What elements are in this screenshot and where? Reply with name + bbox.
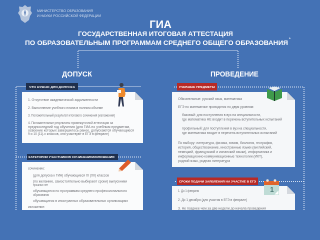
text: subjects list xyxy=(178,97,282,163)
heading: ПРОВЕДЕНИЕ: ПРОВЕДЕНИЕ xyxy=(210,72,259,78)
text: subjects list: ЕГЭ по математике проводится по двум уровням: xyxy=(178,105,254,109)
title xyxy=(25,19,291,47)
text: subjects list: немецкий, французский и испанский языки), информатика и xyxy=(178,150,272,154)
text: subjects list: где математика входит в перечень вступительных испытаний xyxy=(182,131,277,135)
badge: essay categories: КАТЕГОРИИ УЧАСТНИКОВ СОЧИНЕНИЯ/ИЗЛОЖЕНИЯ xyxy=(28,155,115,159)
ministry name: И НАУКИ РОССИЙСКОЙ ФЕДЕРАЦИИ xyxy=(37,14,102,18)
list: admission conditions: 3. Положительный результат итогового сочинения (изложения) xyxy=(28,114,115,118)
badge: deadlines: СРОКИ ПОДАЧИ ЗАЯВЛЕНИЯ НА УЧАСТИЕ В ЕГЭ xyxy=(179,180,257,184)
list: admission conditions: 9 и 10 (11)-х классов, они участвуют в ЕГЭ в феврале) xyxy=(28,132,109,136)
badge: what is needed: ЧТО НУЖНО ДЛЯ ДОПУСКА xyxy=(29,85,76,89)
list: deadlines xyxy=(178,189,266,210)
text: subjects list: профильный: для поступления в вуз на специальности, xyxy=(182,126,267,130)
text: subjects list: информационно-коммуникационные технологии (ИКТ), xyxy=(178,154,263,158)
list: categories: (для допуска к ГИА) обучающиеся XI (XII) классов xyxy=(33,174,109,178)
text: subjects list: где математика НЕ входит в перечень вступительных испытаний xyxy=(182,118,282,122)
connector: right rail xyxy=(174,87,304,210)
ministry name: МИНИСТЕРСТВО ОБРАЗОВАНИЯ xyxy=(37,9,94,13)
list: admission conditions: 1. Отсутствие академической задолженности xyxy=(28,98,98,102)
title: * xyxy=(289,36,291,41)
panel: application deadlines xyxy=(172,178,295,210)
list: deadlines: 1. До 1 февраля xyxy=(178,189,199,193)
list: admission conditions: предпоследний год обучения (для ГИА по учебным предметам, xyxy=(28,125,130,129)
logo: ministry emblem xyxy=(18,5,32,23)
title: ГИА xyxy=(150,19,172,31)
text: subjects list: история, обществознание, иностранные языки (английский, xyxy=(178,146,272,150)
connector: left rail xyxy=(16,86,141,210)
icon: green book xyxy=(267,86,282,101)
text: subjects list: По выбору: литература, физика, химия, биология, география, xyxy=(178,141,273,145)
list: categories: обучающиеся в иностранных образовательных организациях xyxy=(33,199,128,203)
panel: essay participants xyxy=(22,154,143,210)
title: ПО ОБРАЗОВАТЕЛЬНЫМ ПРОГРАММАМ СРЕДНЕГО ОБЩЕГО ОБРАЗОВАНИЯ xyxy=(25,40,288,47)
panel: school subjects xyxy=(172,83,295,167)
title: ГОСУДАРСТВЕННАЯ ИТОГОВАЯ АТТЕСТАЦИЯ xyxy=(78,31,233,38)
list: categories: изложение: xyxy=(28,205,45,209)
icon: calendar: 1 xyxy=(270,187,274,194)
panel: admission requirements xyxy=(22,83,143,143)
text: subjects list: родной язык, родная литература xyxy=(178,159,230,163)
heading: ДОПУСК: ДОПУСК xyxy=(62,72,93,78)
list: deadlines: 2. До 1 декабря (для участия в ЕГЭ в феврале) xyxy=(178,198,247,202)
list: admission conditions: 2. Выполнение учебного плана в полном объеме xyxy=(28,106,103,110)
connector: title to sections xyxy=(78,50,238,68)
icon: person with paper xyxy=(117,83,126,106)
list: admission conditions: 4. Положительные результаты промежуточной аттестации за xyxy=(28,121,113,125)
list: categories: обучающиеся по программам среднего профессионального xyxy=(33,189,127,193)
list: admission conditions: освоение которых завершилось ранее, допускаются обучающиеся xyxy=(28,128,134,132)
ministry name xyxy=(37,9,102,18)
list: categories xyxy=(28,166,128,209)
list: categories: прошлых лет xyxy=(33,183,48,187)
badge: subjects: УЧЕБНЫЕ ПРЕДМЕТЫ xyxy=(179,85,215,89)
list: categories: сочинение: xyxy=(28,166,45,170)
icon: calendar xyxy=(264,179,279,195)
list: admission conditions xyxy=(28,98,134,136)
list: categories: образования xyxy=(33,193,49,197)
icon: pencil xyxy=(118,160,131,172)
text: subjects list: базовый: для поступления в вуз на специальности, xyxy=(182,113,261,117)
list: categories: (по желанию, самостоятельно выбирают сроки) выпускники xyxy=(33,180,127,184)
text: subjects list: Обязательные: русский язык, математика xyxy=(178,97,242,101)
